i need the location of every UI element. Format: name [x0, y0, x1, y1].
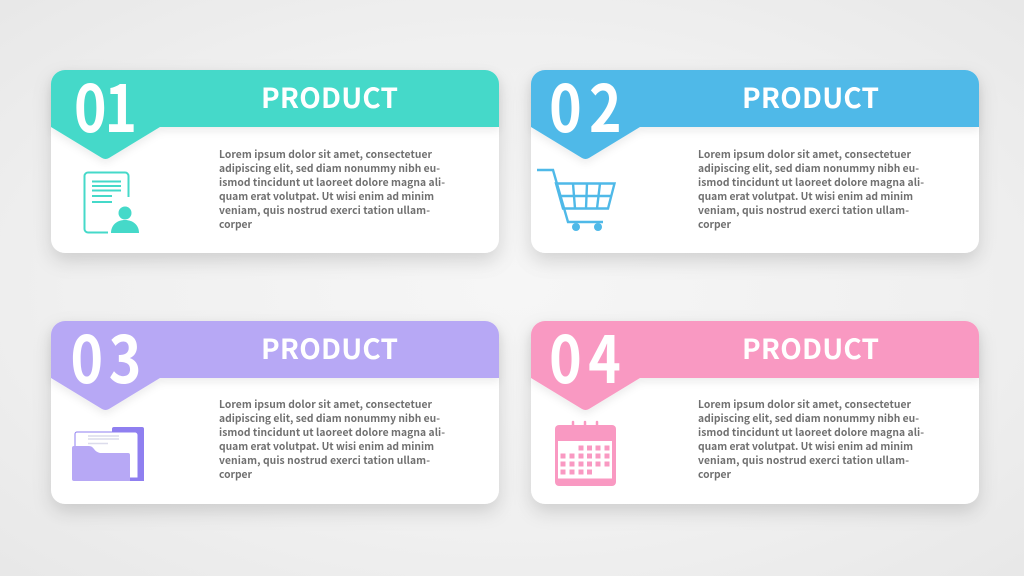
text block 02	[698, 146, 924, 231]
number 04: 04	[549, 309, 621, 402]
text block 02: adipiscing elit, sed diam nonummy nibh eu-	[698, 160, 919, 175]
text block 03: corper	[219, 466, 252, 481]
text block 04: ismod tincidunt ut laoreet dolore magna ali-	[698, 424, 924, 439]
text block 03: adipiscing elit, sed diam nonummy nibh eu-	[219, 410, 440, 425]
text block 01: adipiscing elit, sed diam nonummy nibh eu-	[219, 160, 440, 175]
text block 04: quam erat volutpat. Ut wisi enim ad minim	[698, 438, 913, 453]
header banner 02	[531, 70, 979, 159]
icon: document with person	[84, 172, 139, 233]
heading 01: PRODUCT	[261, 77, 398, 117]
text block 04: veniam, quis nostrud exerci tation ullam-	[698, 452, 909, 467]
card background 04	[531, 321, 979, 504]
text block 02: Lorem ipsum dolor sit amet, consectetuer	[698, 146, 912, 161]
heading 04: PRODUCT	[742, 328, 879, 368]
card background 03	[51, 321, 499, 504]
text block 03: Lorem ipsum dolor sit amet, consectetuer	[219, 396, 432, 411]
text block 01: Lorem ipsum dolor sit amet, consectetuer	[219, 146, 432, 161]
panel: product 03	[51, 309, 499, 504]
card background 02	[531, 70, 979, 253]
text block 01	[219, 146, 445, 231]
text block 02: veniam, quis nostrud exerci tation ullam-	[698, 202, 909, 217]
panel: product 01	[51, 58, 499, 253]
text block 02: ismod tincidunt ut laoreet dolore magna ali-	[698, 174, 924, 189]
panel: product 02	[531, 58, 979, 253]
icon: folder	[72, 427, 144, 481]
text block 01: ismod tincidunt ut laoreet dolore magna ali-	[219, 174, 445, 189]
text block 02: corper	[698, 216, 732, 231]
number 03: 03	[71, 309, 141, 402]
text block 04: adipiscing elit, sed diam nonummy nibh eu-	[698, 410, 919, 425]
text block 04: Lorem ipsum dolor sit amet, consectetuer	[698, 396, 912, 411]
text block 03: veniam, quis nostrud exerci tation ullam-	[219, 452, 430, 467]
number 02: 02	[549, 58, 622, 151]
text block 01: quam erat volutpat. Ut wisi enim ad minim	[219, 188, 434, 203]
text block 03: ismod tincidunt ut laoreet dolore magna ali-	[219, 424, 445, 439]
card background 01	[51, 70, 499, 253]
icon: shopping cart	[537, 170, 614, 231]
text block 04	[698, 396, 924, 481]
header banner 03	[51, 321, 499, 410]
text block 03: quam erat volutpat. Ut wisi enim ad minim	[219, 438, 434, 453]
panel: product 04	[531, 309, 979, 504]
heading 03: PRODUCT	[261, 328, 398, 368]
text block 01: veniam, quis nostrud exerci tation ullam-	[219, 202, 430, 217]
header banner 04	[531, 321, 979, 410]
icon: calendar	[555, 422, 616, 486]
header banner 01	[51, 70, 499, 159]
number 01: 01	[74, 58, 137, 151]
text block 04: corper	[698, 466, 732, 481]
heading 02: PRODUCT	[742, 77, 879, 117]
text block 03	[219, 396, 445, 481]
text block 01: corper	[219, 216, 252, 231]
text block 02: quam erat volutpat. Ut wisi enim ad minim	[698, 188, 913, 203]
